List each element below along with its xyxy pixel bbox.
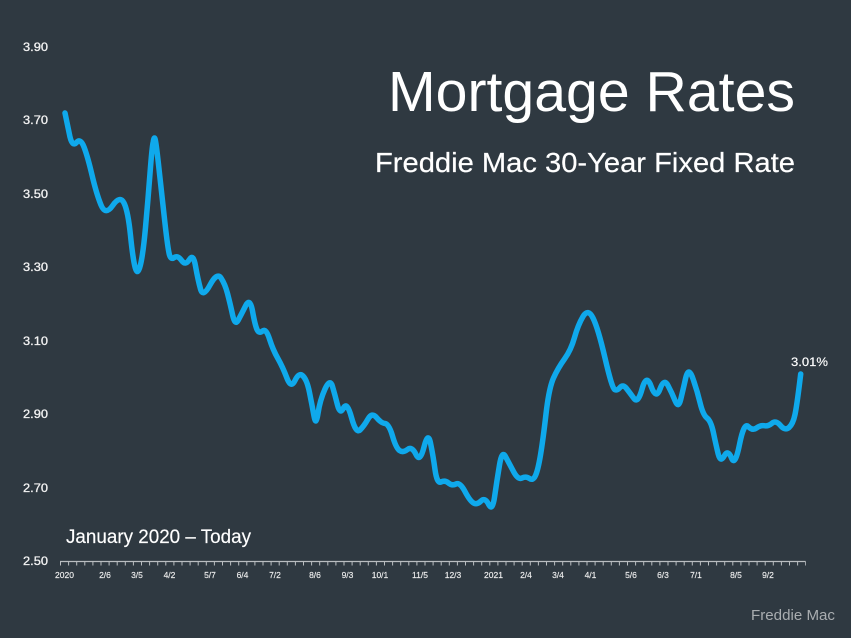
x axis date labels: 2021 [484,570,503,580]
date range caption: January 2020 – Today [66,527,251,548]
x axis date labels: 2/6 [99,570,111,580]
y axis labels: 3.70 [23,115,48,127]
title: Mortgage Rates [388,60,795,124]
x axis date labels: 4/1 [585,570,597,580]
x axis date labels: 9/2 [762,570,774,580]
y axis labels: 2.50 [23,556,48,568]
x axis date labels: 6/3 [657,570,669,580]
y axis labels [23,42,48,568]
x axis date labels: 12/3 [445,570,462,580]
x axis date labels: 2020 [55,570,74,580]
x axis date labels: 7/1 [690,570,702,580]
y axis labels: 3.30 [23,262,48,274]
subtitle: Freddie Mac 30-Year Fixed Rate [375,147,795,178]
source credit: Freddie Mac [751,608,835,624]
end value callout: 3.01% [791,355,828,369]
x axis date labels: 6/4 [237,570,249,580]
y axis labels: 2.70 [23,483,48,495]
x axis date labels: 3/4 [552,570,564,580]
y axis labels: 3.50 [23,189,48,201]
x axis date labels: 9/3 [342,570,354,580]
x axis date labels: 8/5 [730,570,742,580]
x axis date labels: 11/5 [412,570,428,580]
x axis date labels [55,570,774,580]
x axis date labels: 5/7 [204,570,216,580]
line chart: mortgage rate series [65,113,801,507]
x axis date labels: 2/4 [520,570,532,580]
x axis date labels: 10/1 [372,570,389,580]
x axis date labels: 4/2 [164,570,176,580]
y axis labels: 2.90 [23,409,48,421]
y axis labels: 3.90 [23,42,48,54]
y axis labels: 3.10 [23,336,48,348]
x axis date labels: 5/6 [625,570,637,580]
x axis date labels: 8/6 [309,570,321,580]
x axis date labels: 7/2 [269,570,281,580]
x axis date labels: 3/5 [131,570,143,580]
x axis line with ticks [60,562,806,564]
